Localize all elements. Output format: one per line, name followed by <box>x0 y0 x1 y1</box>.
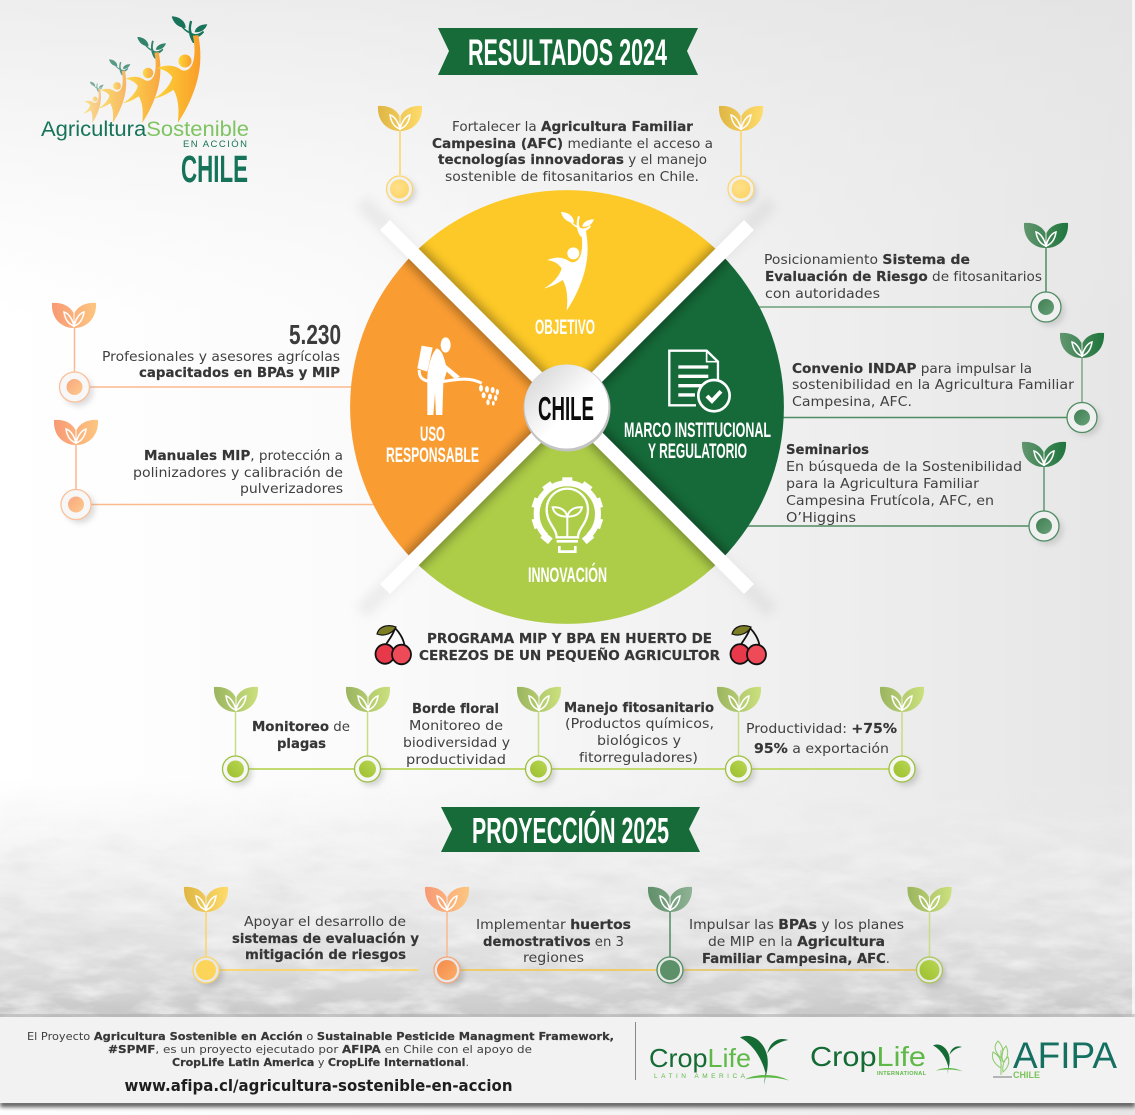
footer url: www.afipa.cl/agricultura-sostenible-en-accion <box>124 1076 512 1095</box>
logo wordmark: AgriculturaSostenible <box>41 118 249 141</box>
label: uso responsable: RESPONSABLE <box>386 444 479 467</box>
text: monitoreo de plagas <box>252 720 350 752</box>
text: convenio INDAP <box>792 362 1075 410</box>
text: sistema de evaluación: Posicionamiento Sistema de <box>764 253 970 268</box>
logo: AFIPA Chile: AFIPA <box>1013 1035 1117 1076</box>
text: 5.230 capacitados: Profesionales y asesores agrícolas <box>102 349 340 365</box>
banner: Resultados 2024: RESULTADOS 2024 <box>468 32 667 73</box>
text: manejo fitosanitario: Manejo fitosanitario <box>564 701 714 716</box>
text: impulsar: Impulsar las BPAs y los planes <box>689 918 904 933</box>
text: 5.230 capacitados: capacitados en BPAs y MIP <box>139 366 340 381</box>
label: uso responsable <box>386 423 479 467</box>
node: marco 2 <box>1060 333 1104 436</box>
text: manuales MIP: Manuales MIP, protección a <box>144 448 343 464</box>
text: convenio INDAP: sostenibilidad en la Agricultura Familiar <box>792 378 1075 393</box>
band tails <box>362 202 772 612</box>
text: productividad <box>746 722 897 757</box>
text: 5.230 capacitados <box>102 319 341 381</box>
node: AFC <box>907 887 952 987</box>
text: apoyar: Apoyar el desarrollo de <box>244 915 406 930</box>
text: sistema de evaluación: Evaluación de Riesgo de fitosanitarios <box>765 269 1042 285</box>
text: seminarios <box>786 443 1022 526</box>
text: productividad: 95% a exportación <box>754 741 889 757</box>
node: huertos <box>425 887 469 987</box>
logo: CropLife Latin America: CropLife <box>649 1043 751 1073</box>
node: borde floral <box>346 687 390 786</box>
text: manuales MIP: pulverizadores <box>240 482 343 497</box>
node: marco 3 <box>1022 442 1066 545</box>
text: manejo fitosanitario: fitorreguladores) <box>579 751 698 766</box>
text: impulsar <box>689 918 904 967</box>
text: huertos: demostrativos en 3 <box>483 935 624 950</box>
text: borde floral <box>403 702 510 768</box>
segment: marco institucional <box>567 254 784 560</box>
node: productividad <box>717 687 761 786</box>
logo country: CHILE <box>181 149 248 191</box>
logo: CropLife Latin America <box>649 1036 789 1085</box>
node: top right yellow <box>719 106 763 205</box>
connector lines <box>89 307 1067 526</box>
icon: sprayer person <box>417 337 499 415</box>
logo: AFIPA Chile: CHILE <box>1013 1070 1040 1080</box>
segment: uso responsable <box>350 254 567 560</box>
diagonal bands <box>385 225 749 589</box>
text: manejo fitosanitario: (Productos químicos, <box>565 716 714 732</box>
timeline: proyección 2025 <box>184 887 952 987</box>
text: objective <box>432 120 713 185</box>
text: manuales MIP <box>133 448 343 497</box>
logo tagline: EN ACCIÓN <box>183 139 247 150</box>
text: seminarios: para la Agricultura Familiar <box>786 477 980 492</box>
text: apoyar: mitigación de riesgos <box>245 947 406 963</box>
text: sistema de evaluación <box>764 253 1042 302</box>
text: manuales MIP: polinizadores y calibración de <box>133 465 343 481</box>
node: exportación <box>880 687 924 786</box>
heading: programa MIP y BPA <box>419 632 721 664</box>
logo: Agricultura Sostenible en Acción Chile <box>41 16 249 191</box>
label: innovación: INNOVACIÓN <box>528 563 607 587</box>
segment: objetivo <box>414 190 720 407</box>
icon: gear with bulb <box>532 477 603 552</box>
node: monitoreo <box>214 687 258 786</box>
icon: cherries left <box>376 626 411 664</box>
text: huertos: regiones <box>523 951 584 966</box>
text: seminarios: Seminarios <box>786 443 869 458</box>
icon: growing figures <box>83 16 207 123</box>
footer panel <box>0 1014 1135 1107</box>
label: marco institucional <box>624 419 771 463</box>
node: marco 1 <box>1024 223 1068 326</box>
text: manejo fitosanitario: biológicos y <box>597 733 681 749</box>
footer text: CropLife Latin America y CropLife International. <box>172 1056 469 1069</box>
logo: CropLife International <box>810 1041 963 1077</box>
banner: Resultados 2024 <box>438 28 698 75</box>
segment: innovación <box>414 407 720 624</box>
text: apoyar <box>232 915 419 963</box>
text: monitoreo de plagas: plagas <box>277 737 326 752</box>
timeline: programa huerto de cerezos <box>214 687 924 786</box>
text: impulsar: Familiar Campesina, AFC. <box>702 952 890 967</box>
logo: CropLife International: INTERNATIONAL <box>877 1071 927 1077</box>
text: monitoreo de plagas: Monitoreo de <box>252 720 350 735</box>
icon: cherries right <box>730 626 766 664</box>
text: impulsar: de MIP en la Agricultura <box>708 935 885 950</box>
text: seminarios: O’Higgins <box>786 511 856 526</box>
icon: person with sprout <box>544 212 594 311</box>
text: objective: sostenible de fitosanitarios en Chile. <box>445 170 699 185</box>
heading: programa MIP y BPA: CEREZOS DE UN PEQUEÑO AGRICULTOR <box>419 647 721 664</box>
node: uso responsable 1 <box>52 303 96 406</box>
label: marco institucional: MARCO INSTITUCIONAL <box>624 419 771 442</box>
node: top left yellow <box>378 106 422 205</box>
text: sistema de evaluación: con autoridades <box>765 287 880 302</box>
text: apoyar: sistemas de evaluación y <box>232 931 419 947</box>
hub: Chile <box>524 364 610 452</box>
text: huertos <box>476 918 631 966</box>
text: convenio INDAP: Convenio INDAP para impulsar la <box>792 362 1032 377</box>
logo: CropLife Latin America: LATIN AMERICA <box>654 1073 746 1080</box>
text: 5.230 capacitados: 5.230 <box>289 319 341 350</box>
text: borde floral: biodiversidad y <box>403 736 510 751</box>
label: marco institucional: Y REGULATORIO <box>648 440 747 463</box>
heading: programa MIP y BPA: PROGRAMA MIP Y BPA EN HUERTO DE <box>427 632 712 647</box>
node: BPAs <box>648 887 692 987</box>
text: objective: Fortalecer la Agricultura Familiar <box>452 120 693 135</box>
footer text: #SPMF , es un proyecto ejecutado por AFIPA en Chile con el apoyo de <box>108 1043 532 1056</box>
text: borde floral: Monitoreo de <box>409 719 503 734</box>
text: seminarios: En búsqueda de la Sostenibilidad <box>786 459 1022 475</box>
node: manejo <box>517 687 561 786</box>
banner: Proyección 2025: PROYECCIÓN 2025 <box>472 809 669 851</box>
text: huertos: Implementar huertos <box>476 918 631 933</box>
text: manejo fitosanitario <box>564 701 714 766</box>
banner: Proyección 2025 <box>441 807 700 852</box>
label: objetivo: OBJETIVO <box>535 316 595 339</box>
text: objective: tecnologías innovadoras y el manejo <box>438 152 707 168</box>
node: evaluación <box>184 887 228 987</box>
text: seminarios: Campesina Frutícola, AFC, en <box>786 493 994 509</box>
text: convenio INDAP: Campesina, AFC. <box>792 395 912 410</box>
label: uso responsable: USO <box>420 423 445 446</box>
footer text <box>27 1030 614 1069</box>
node: uso responsable 2 <box>54 420 98 523</box>
hub: Chile: CHILE <box>538 390 594 427</box>
logo: CropLife International: CropLife <box>810 1041 926 1072</box>
text: objective: Campesina (AFC) mediante el acceso a <box>432 137 713 152</box>
icon: document with check <box>669 351 730 411</box>
text: productividad: Productividad: +75% <box>746 722 897 737</box>
text: borde floral: Borde floral <box>412 702 499 717</box>
footer text: El Proyecto Agricultura Sostenible en Acción o Sustainable Pesticide Managment Framework, <box>27 1030 614 1043</box>
wheel diagram <box>350 190 784 624</box>
text: borde floral: productividad <box>406 753 506 768</box>
